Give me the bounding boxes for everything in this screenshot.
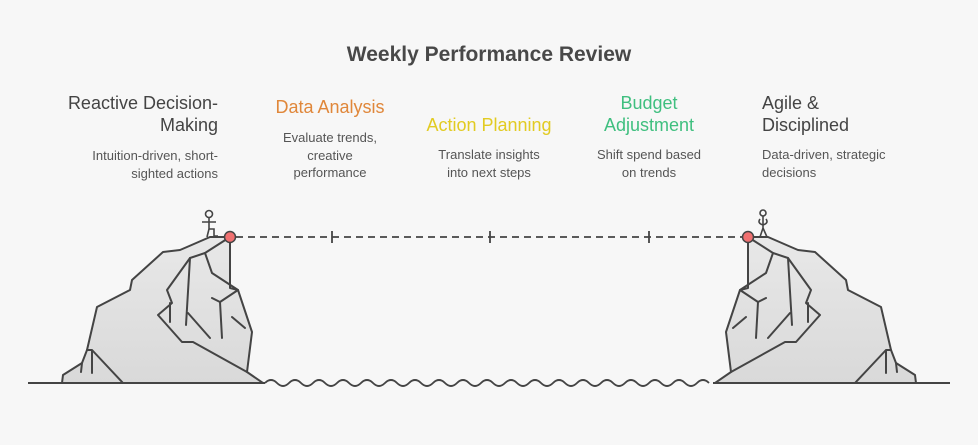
text: reactive decision-making (68, 93, 218, 180)
icon: right figure (759, 210, 767, 237)
text: reactive decision-making: Reactive Decision- (68, 93, 218, 113)
text: action planning: Action Planning (426, 115, 552, 135)
text: reactive decision-making: Making (160, 115, 218, 135)
dot: start (224, 232, 236, 242)
text: data analysis: Evaluate trends, (283, 130, 377, 145)
text: budget adjustment: Shift spend based (597, 147, 701, 162)
text: action planning: Translate insights (438, 147, 540, 162)
text: budget adjustment (597, 93, 701, 180)
text: data analysis: creative (307, 148, 353, 162)
dashed path with milestones (236, 231, 742, 243)
text: agile & disciplined: Data-driven, strategic (762, 147, 886, 162)
text: data analysis: Data Analysis (275, 97, 385, 117)
dot: end (742, 232, 754, 242)
text: agile & disciplined: Disciplined (762, 115, 849, 135)
text: action planning: into next steps (447, 164, 531, 180)
title: Weekly Performance Review (347, 43, 631, 66)
text: agile & disciplined: Agile & (762, 93, 819, 113)
text: reactive decision-making: Intuition-driven, short- (92, 148, 218, 163)
text: budget adjustment: Adjustment (604, 115, 694, 135)
text: data analysis (275, 97, 385, 180)
right cliff (713, 237, 950, 383)
text: agile & disciplined (762, 93, 886, 180)
text: reactive decision-making: sighted actions (131, 166, 218, 180)
text: budget adjustment: on trends (622, 164, 676, 180)
text: budget adjustment: Budget (620, 93, 678, 113)
water waves (265, 380, 709, 386)
icon: left figure (202, 210, 218, 237)
text: agile & disciplined: decisions (762, 164, 816, 180)
text: data analysis: performance (294, 165, 366, 180)
text: action planning (426, 115, 552, 180)
left cliff (28, 237, 265, 383)
